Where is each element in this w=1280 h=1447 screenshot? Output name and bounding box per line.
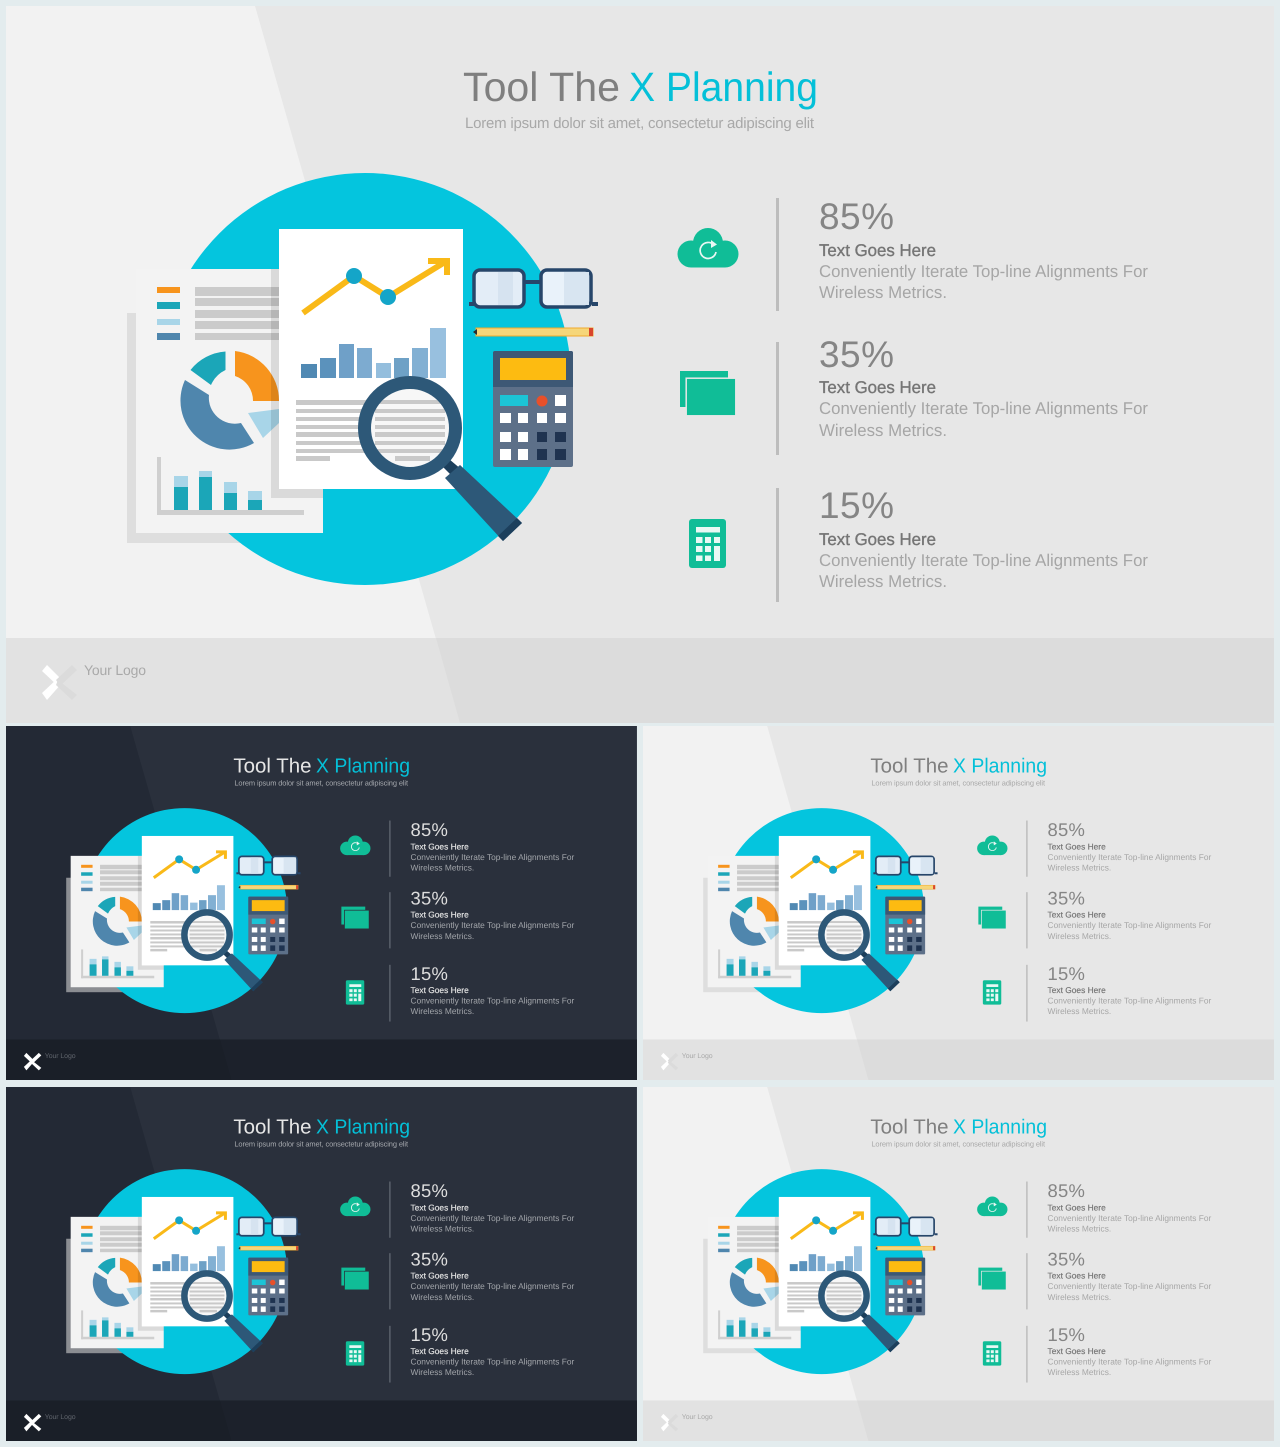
metric: 35%: Text Goes Here — [411, 1271, 469, 1281]
main document shadow — [271, 269, 323, 498]
metric: 15%: Conveniently Iterate Top-line Alignments For — [819, 551, 1148, 570]
logo — [24, 1051, 76, 1070]
metric: 15%: Text Goes Here — [411, 1347, 469, 1356]
logo — [42, 662, 146, 700]
metric: 15% — [389, 963, 574, 1022]
metric: 35%: Conveniently Iterate Top-line Alignments For — [1048, 1282, 1211, 1291]
metric: 15%: Wireless Metrics. — [1048, 1368, 1111, 1377]
title: Tool The — [233, 1115, 312, 1138]
logo — [24, 1412, 76, 1431]
title: X Planning — [629, 64, 818, 110]
metric: 35%: Text Goes Here — [1048, 1271, 1106, 1281]
metric: 35%: Wireless Metrics. — [1048, 1292, 1111, 1302]
metric: 85%: Conveniently Iterate Top-line Alignments For — [1048, 1213, 1211, 1223]
main document — [279, 229, 463, 489]
metric: 85%: Wireless Metrics. — [819, 283, 947, 302]
logo: Your Logo — [682, 1412, 713, 1420]
icons — [340, 835, 370, 1005]
metric: 15%: Text Goes Here — [1048, 986, 1106, 995]
panel: light slide top right — [643, 725, 1274, 1082]
title: X Planning — [953, 754, 1047, 777]
line chart with arrow — [303, 261, 447, 313]
metric: 85%: 85% — [1048, 820, 1085, 840]
metric: 15%: Text Goes Here — [819, 530, 936, 549]
metric: 85% — [1026, 1181, 1211, 1238]
illustration — [703, 1169, 938, 1374]
metric: 15%: Text Goes Here — [1048, 1347, 1106, 1356]
subtitle: Lorem ipsum dolor sit amet, consectetur adipiscing elit — [871, 1140, 1045, 1149]
metric: 15%: Wireless Metrics. — [411, 1007, 474, 1016]
left document shadow — [127, 313, 323, 543]
subtitle: Lorem ipsum dolor sit amet, consectetur adipiscing elit — [234, 1140, 408, 1149]
metric: 85%: Text Goes Here — [819, 241, 936, 260]
illustration: documents and planning tools — [127, 173, 598, 585]
logo: Your Logo — [45, 1051, 76, 1059]
title: X Planning — [953, 1115, 1047, 1138]
metric: 35%: Conveniently Iterate Top-line Alignments For — [819, 399, 1148, 418]
metric: 15%: Conveniently Iterate Top-line Alignments For — [1048, 1357, 1211, 1367]
metric: 15%: 15% — [819, 485, 894, 526]
metric: 15%: Conveniently Iterate Top-line Alignments For — [411, 996, 574, 1006]
metric: 35%: Wireless Metrics. — [411, 931, 474, 941]
metric: 35%: 35% — [411, 888, 448, 909]
metric: 15%: 15% — [1048, 1324, 1085, 1345]
donut chart — [180, 351, 279, 450]
metric: 15%: Conveniently Iterate Top-line Alignments For — [411, 1357, 574, 1367]
metric: 15%: 15% — [1048, 963, 1085, 984]
metric: 15%: Wireless Metrics. — [1048, 1007, 1111, 1016]
title: Tool The — [233, 754, 312, 777]
metric: 15% — [776, 485, 1148, 602]
panel: main light slide — [6, 6, 1274, 723]
metric: 85%: Wireless Metrics. — [1048, 1224, 1111, 1233]
metric: 85%: Conveniently Iterate Top-line Alignments For — [411, 852, 574, 862]
metric: 85% — [389, 1181, 574, 1238]
metric: 35%: Text Goes Here — [819, 378, 936, 397]
illustration — [703, 808, 938, 1013]
teal circle — [159, 173, 571, 585]
metric: 35%: Wireless Metrics. — [1048, 931, 1111, 941]
icons — [340, 1196, 370, 1366]
metric: 15%: Wireless Metrics. — [411, 1368, 474, 1377]
title: Tool The — [870, 754, 949, 777]
metric: 35%: Wireless Metrics. — [819, 421, 947, 440]
metric: 85%: 85% — [411, 1181, 448, 1201]
metric: 35% — [389, 1249, 574, 1309]
icon: stacked windows — [680, 371, 736, 416]
text lines on main document — [296, 400, 445, 461]
metric: 15%: Text Goes Here — [411, 986, 469, 995]
metric: 35% — [389, 888, 574, 948]
icons — [977, 1196, 1007, 1366]
metric: 15%: 15% — [411, 963, 448, 984]
subtitle: Lorem ipsum dolor sit amet, consectetur adipiscing elit — [234, 779, 408, 788]
metric: 15% — [389, 1324, 574, 1383]
metric: 35%: 35% — [411, 1249, 448, 1270]
metric: 35% — [1026, 1249, 1211, 1309]
metric: 35%: 35% — [1048, 1249, 1085, 1270]
title: Tool The — [463, 64, 620, 110]
logo — [661, 1412, 713, 1431]
subtitle: Lorem ipsum dolor sit amet, consectetur adipiscing elit — [465, 115, 815, 132]
icons — [977, 835, 1007, 1005]
title: Tool The — [870, 1115, 949, 1138]
illustration — [66, 808, 301, 1013]
metric: 85%: 85% — [1048, 1181, 1085, 1201]
icon: cloud refresh — [678, 228, 738, 268]
logo: Your Logo — [682, 1051, 713, 1059]
metric: 85% — [389, 820, 574, 877]
logo — [661, 1051, 713, 1070]
metric: 85% — [1026, 820, 1211, 877]
metric: 35% — [776, 334, 1148, 455]
metric: 85%: Text Goes Here — [411, 1203, 469, 1212]
pencil — [473, 328, 593, 336]
column chart — [301, 328, 446, 378]
logo: Your Logo — [84, 662, 146, 678]
panel: dark slide top left — [6, 725, 637, 1082]
metric: 35%: Wireless Metrics. — [411, 1292, 474, 1302]
panel: dark slide bottom left — [6, 1086, 637, 1443]
metric: 15% — [1026, 1324, 1211, 1383]
metric: 35%: Text Goes Here — [1048, 910, 1106, 920]
metric: 15%: 15% — [411, 1324, 448, 1345]
metric: 35%: Conveniently Iterate Top-line Alignments For — [411, 1282, 574, 1291]
small bar chart — [157, 457, 304, 515]
icon: calculator — [689, 519, 726, 568]
metric: 85%: Text Goes Here — [1048, 842, 1106, 851]
metric: 85%: 85% — [411, 820, 448, 840]
metrics list — [678, 228, 738, 568]
metric: 85%: 85% — [819, 196, 894, 237]
metric: 15%: Wireless Metrics. — [819, 572, 947, 591]
metric: 85%: Conveniently Iterate Top-line Alignments For — [411, 1213, 574, 1223]
metric: 85%: Conveniently Iterate Top-line Alignments For — [819, 262, 1148, 281]
metric: 35%: 35% — [1048, 888, 1085, 909]
metric: 85%: Wireless Metrics. — [411, 1224, 474, 1233]
metric: 35%: 35% — [819, 334, 894, 375]
metric: 35%: Text Goes Here — [411, 910, 469, 920]
subtitle: Lorem ipsum dolor sit amet, consectetur adipiscing elit — [871, 779, 1045, 788]
calculator — [493, 351, 573, 467]
metric: 35% — [1026, 888, 1211, 948]
metric: 15% — [1026, 963, 1211, 1022]
metric: 85% — [776, 196, 1148, 311]
metric: 85%: Wireless Metrics. — [411, 863, 474, 872]
metric: 35%: Conveniently Iterate Top-line Alignments For — [1048, 921, 1211, 930]
metric: 15%: Conveniently Iterate Top-line Alignments For — [1048, 996, 1211, 1006]
glasses — [469, 270, 598, 307]
magnifying glass — [364, 382, 522, 541]
metric: 85%: Text Goes Here — [411, 842, 469, 851]
title: X Planning — [316, 754, 410, 777]
illustration — [66, 1169, 301, 1374]
metric: 85%: Text Goes Here — [1048, 1203, 1106, 1212]
title: X Planning — [316, 1115, 410, 1138]
metric: 85%: Wireless Metrics. — [1048, 863, 1111, 872]
logo: Your Logo — [45, 1412, 76, 1420]
metric: 35%: Conveniently Iterate Top-line Alignments For — [411, 921, 574, 930]
panel: light slide bottom right — [643, 1086, 1274, 1443]
metric: 85%: Conveniently Iterate Top-line Alignments For — [1048, 852, 1211, 862]
left document — [136, 269, 323, 533]
